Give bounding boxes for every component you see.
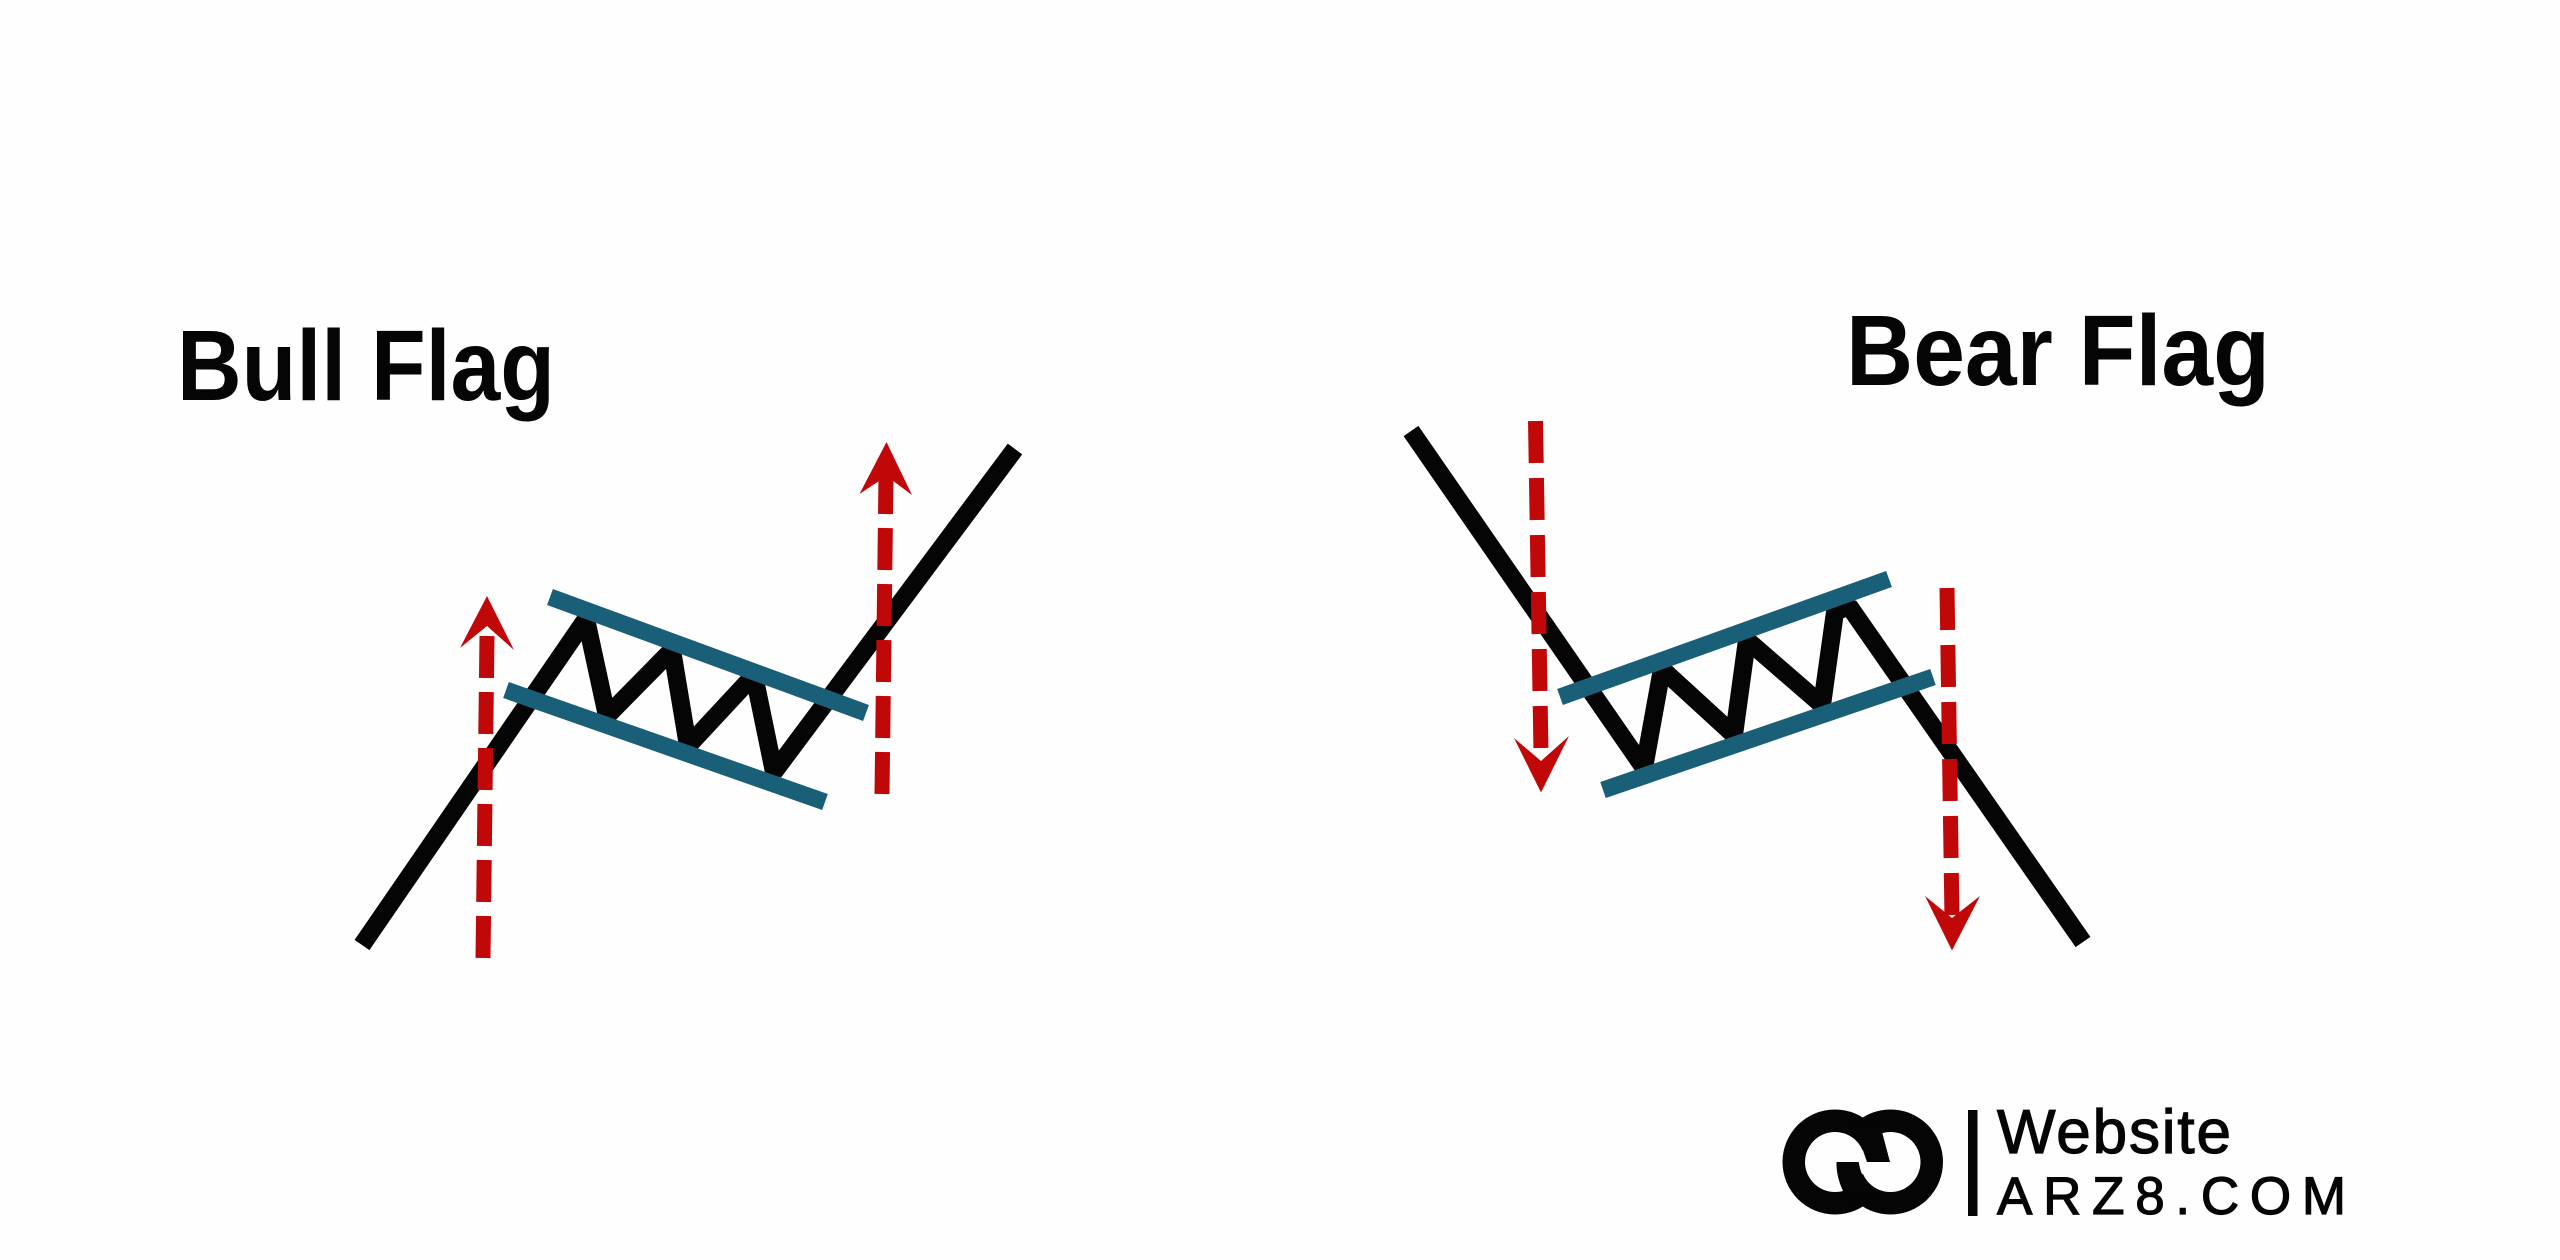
logo divider bar [1968, 1110, 1978, 1216]
logo text: Website: Website [1997, 1098, 2231, 1167]
heading: Bull Flag: Bull Flag [177, 310, 555, 422]
price line with zigzag consolidation [1411, 431, 2083, 942]
right red dashed arrow pointing down [1925, 588, 1980, 950]
logo text: ARZ8.COM: ARZ8.COM [1997, 1167, 2346, 1226]
logo: Website ARZ8.COM [1782, 1098, 2346, 1226]
left red dashed arrow pointing up [460, 596, 514, 958]
heading: Bear Flag: Bear Flag [1846, 295, 2270, 407]
right red dashed arrow pointing up [860, 442, 912, 794]
lower flag channel line [1603, 677, 1933, 790]
panel: bear flag [1411, 295, 2270, 950]
lower flag channel line [506, 690, 825, 802]
upper flag channel line [550, 597, 866, 713]
panel: bull flag [177, 310, 1015, 958]
left red dashed arrow pointing down [1514, 421, 1569, 792]
icon: interlocked rings [1782, 1110, 1943, 1214]
price line with zigzag consolidation [362, 449, 1015, 945]
upper flag channel line [1560, 579, 1889, 697]
